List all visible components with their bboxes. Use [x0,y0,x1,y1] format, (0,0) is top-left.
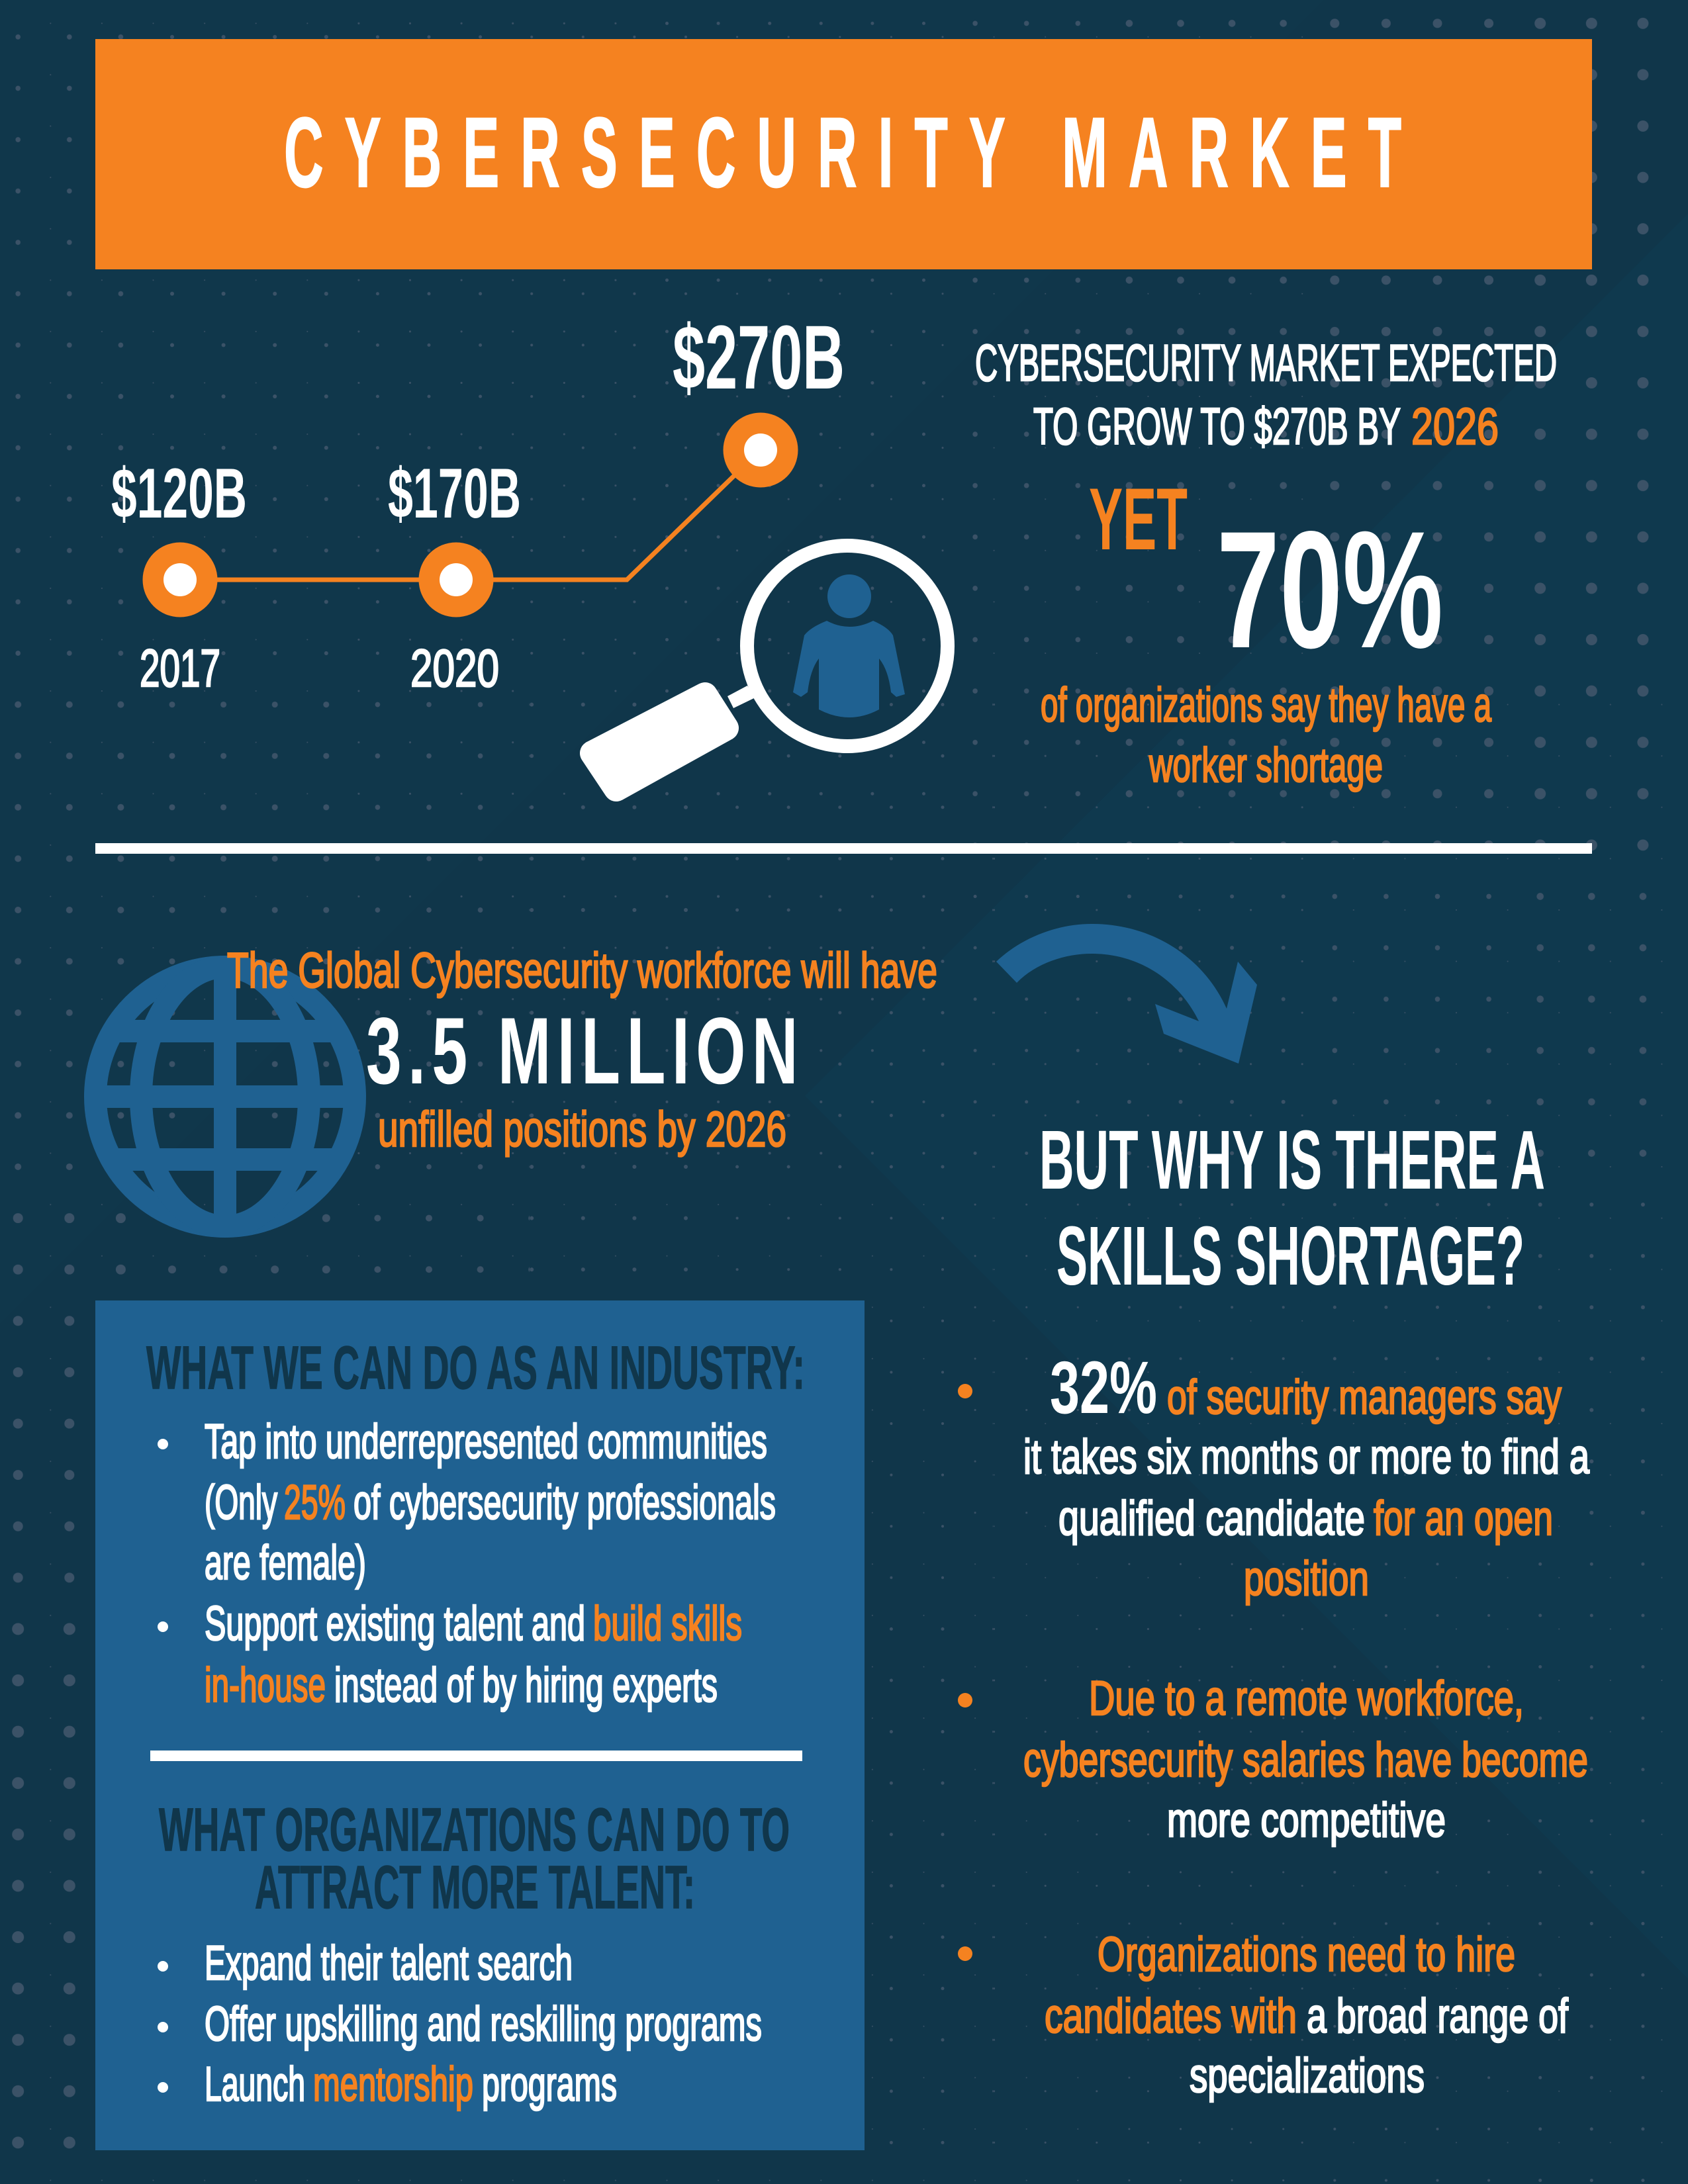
reason: hiring time [958,1346,1589,1606]
text: yet: YET [1089,471,1188,569]
reason: hiring time: qualified candidate [1058,1492,1365,1545]
list: organization actions: Expand their talent search [205,1936,573,1990]
list: organization actions: programs [482,2058,617,2111]
reason: broad specializations: a broad range of [1307,1989,1569,2043]
title banner [95,39,1592,269]
text block: market growth [975,334,1557,455]
point: 2020 [418,543,494,617]
text block: worker shortage [1041,678,1491,792]
list: industry actions: (Only [205,1476,277,1529]
reason: broad specializations: candidates with [1045,1989,1297,2043]
reason: remote salaries [958,1672,1588,1847]
stat: 3.5 million: 3.5 MILLION [366,999,804,1104]
reason: broad specializations [958,1928,1569,2103]
reason: broad specializations: specializations [1190,2049,1425,2103]
stat: 70%: 70% [1217,497,1443,683]
list: industry actions: build skills [593,1597,742,1651]
reason: hiring time: for an open [1374,1492,1553,1545]
reason: hiring time: position [1244,1552,1369,1606]
list: industry actions [158,1415,776,1712]
list: organization actions: Launch [205,2058,305,2111]
list: industry actions: are female) [205,1536,366,1590]
text block: workforce gap: The Global Cybersecurity workforce will have [227,942,937,998]
heading: organizations [159,1796,790,1921]
text block: workforce gap: unfilled positions by 2026 [378,1101,786,1157]
heading: industry: WHAT WE CAN DO AS AN INDUSTRY: [146,1334,805,1402]
market growth timeline chart [111,307,845,698]
list: organization actions [158,1936,762,2111]
value: $120B: $120B [111,453,247,533]
year: 2017: 2017 [140,639,220,698]
list: industry actions: Support existing talent and [205,1597,585,1651]
reason: remote salaries: Due to a remote workforce, [1089,1672,1524,1725]
divider [95,843,1592,854]
list: industry actions: in-house [205,1659,326,1712]
list: organization actions: mentorship [313,2058,473,2111]
heading: organizations: ATTRACT MORE TALENT: [255,1854,695,1921]
panel divider [150,1751,802,1761]
value: $170B: $170B [388,453,521,533]
icon: magnifying glass over person [592,545,948,789]
heading: organizations: WHAT ORGANIZATIONS CAN DO TO [159,1796,790,1864]
reason: broad specializations: Organizations need to hire [1098,1928,1515,1981]
list: industry actions: of cybersecurity professionals [353,1476,776,1529]
list: industry actions: instead of by hiring experts [334,1659,718,1712]
text block: workforce gap [227,942,937,1157]
text block: market growth: 2026 [1411,397,1499,455]
value: $270B: $270B [673,307,845,408]
reason: remote salaries: more competitive [1167,1794,1446,1847]
year: 2020: 2020 [410,639,499,698]
text block: market growth: TO GROW TO $270B BY [1033,397,1401,455]
heading: skills shortage [1039,1113,1545,1302]
icon: globe [95,967,355,1226]
list: organization actions: Offer upskilling and reskilling programs [205,1997,762,2051]
panel: what to do [95,1300,865,2150]
list: industry actions: 25% [284,1476,346,1529]
point: 2026 [723,413,798,487]
arrow: curved [996,924,1257,1064]
list: industry actions: Tap into underrepresented communities [205,1415,767,1469]
point: 2017 [143,543,217,617]
text block: worker shortage: worker shortage [1149,739,1383,792]
reason: hiring time: 32% [1050,1346,1157,1429]
